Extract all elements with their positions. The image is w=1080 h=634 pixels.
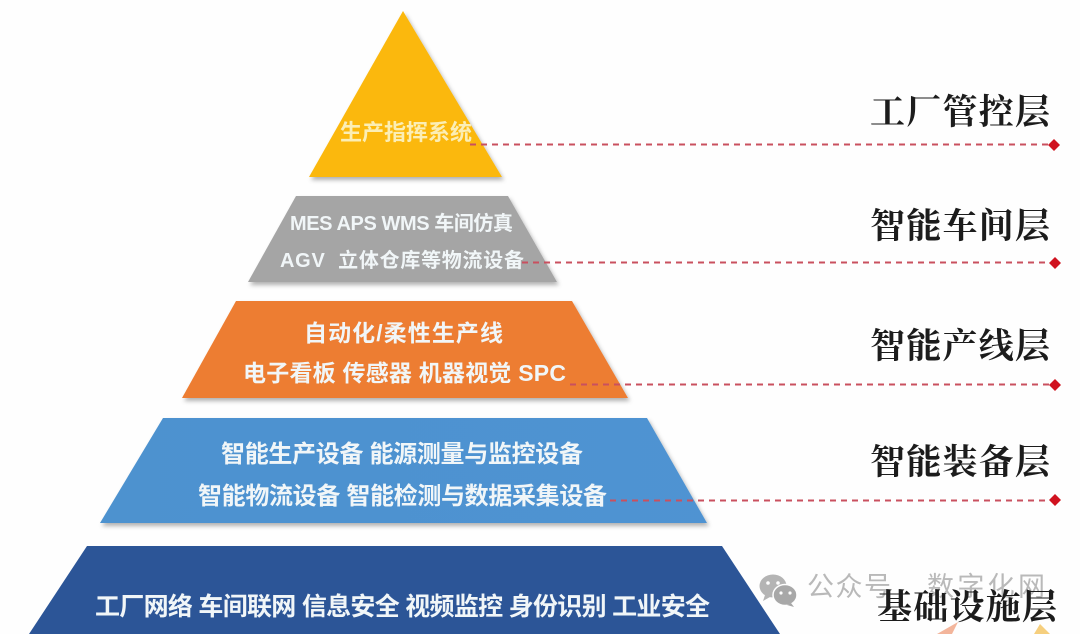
label: factory control layer: 工厂管控层: [870, 93, 1052, 132]
pyramid level 2: workshop: AGV 立体仓库等物流设备: [280, 248, 524, 272]
pyramid level 1: factory control: [309, 11, 502, 177]
pyramid level 3: production line: [182, 301, 628, 398]
connector: equipment: [610, 494, 1061, 506]
pyramid level 4: equipment: 智能生产设备 能源测量与监控设备: [221, 441, 583, 468]
pyramid level 5: infrastructure: [29, 546, 780, 634]
icon: wechat: [760, 574, 797, 607]
connector: workshop: [522, 257, 1061, 269]
label: smart equipment layer: 智能装备层: [870, 443, 1052, 482]
pyramid level 1: factory control: 生产指挥系统: [340, 120, 472, 145]
decorative corner marks: [937, 622, 1050, 634]
pyramid level 5: infrastructure: 工厂网络 车间联网 信息安全 视频监控 身份识别 工业安全: [95, 593, 710, 621]
watermark: [760, 572, 1045, 607]
pyramid level 3: production line: 电子看板 传感器 机器视觉 SPC: [243, 360, 566, 386]
connector: factory control: [470, 139, 1060, 151]
connector: production line: [570, 379, 1061, 391]
pyramid level 4: equipment: [100, 418, 707, 523]
label: smart line layer: 智能产线层: [870, 327, 1052, 366]
pyramid level 2: workshop: MES APS WMS 车间仿真: [290, 211, 513, 235]
pyramid level 4: equipment: 智能物流设备 智能检测与数据采集设备: [198, 482, 607, 510]
label: infrastructure layer: 基础设施层: [877, 588, 1059, 627]
watermark text: 数字化网: [927, 572, 1045, 602]
pyramid level 2: workshop: [248, 196, 557, 282]
label: smart workshop layer: 智能车间层: [870, 207, 1052, 246]
pyramid level 3: production line: 自动化/柔性生产线: [304, 320, 503, 346]
watermark text: 公众号: [807, 572, 891, 602]
